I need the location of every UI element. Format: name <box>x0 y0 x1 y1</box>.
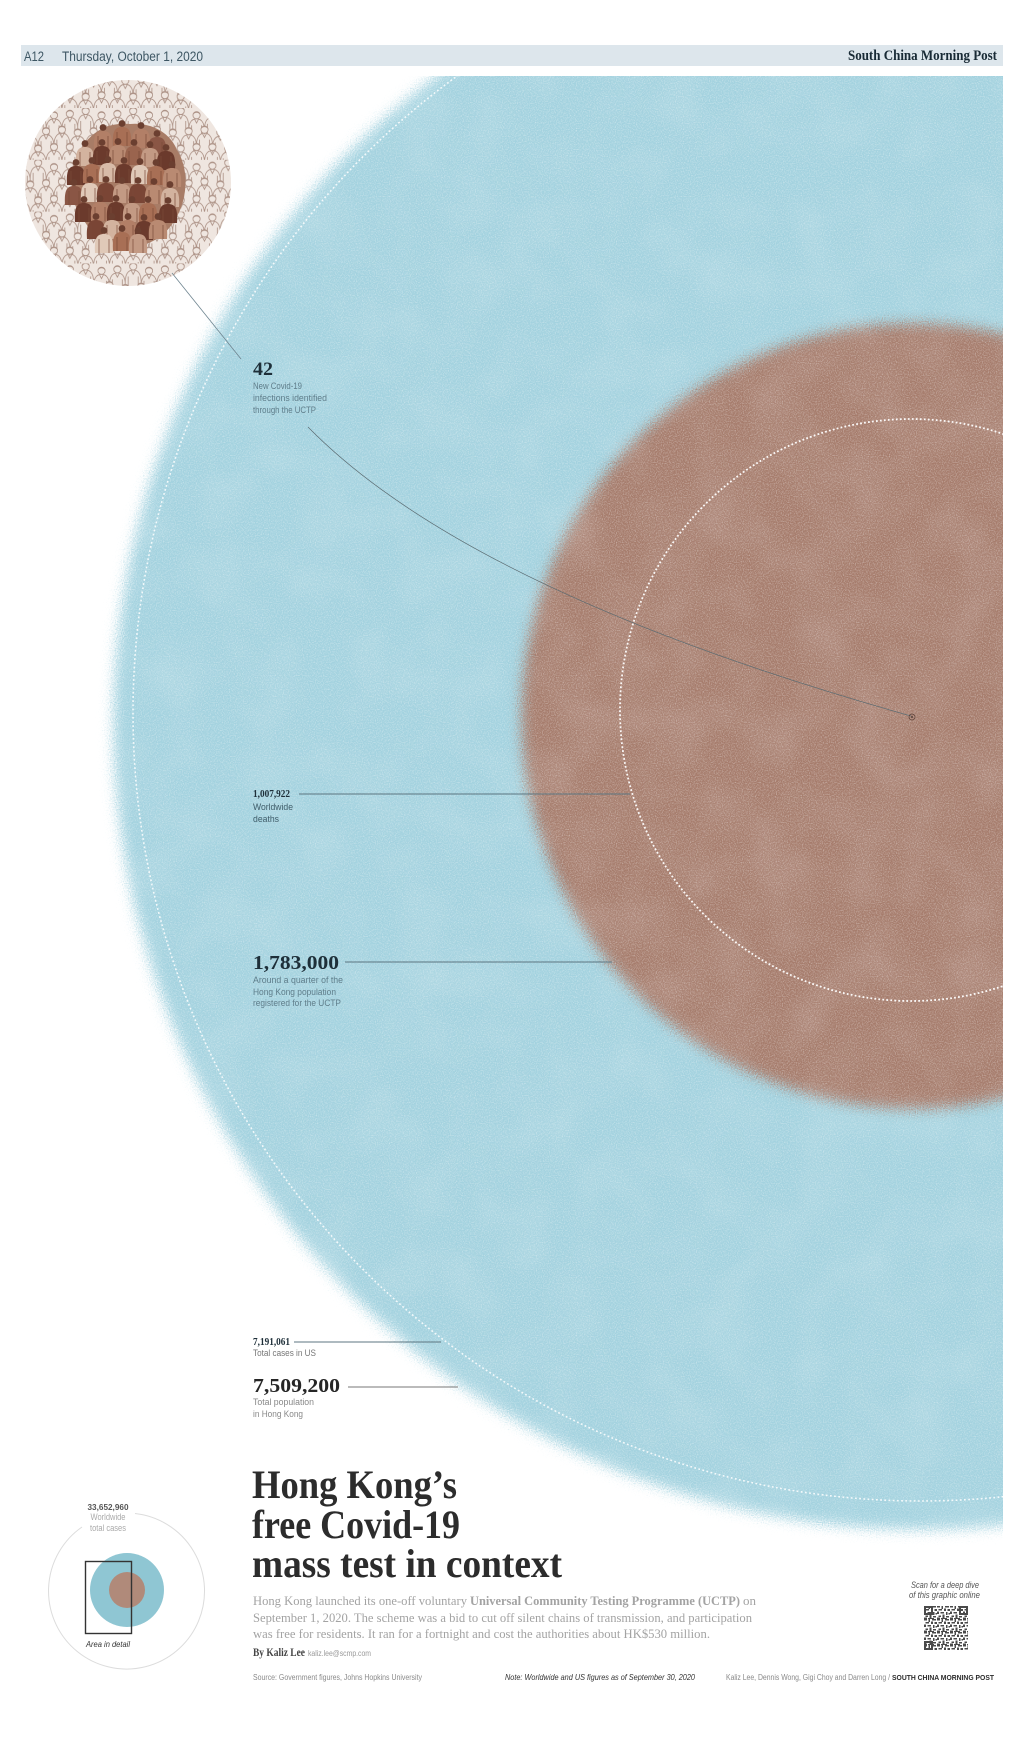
locator brown disc <box>109 1572 145 1608</box>
label: worldwide deaths <box>253 789 630 825</box>
headline <box>252 1462 563 1586</box>
label: 42 new infections: New Covid-19 <box>253 381 302 391</box>
intro paragraph: was free for residents. It ran for a fortnight and cost the authorities about HK$530 million. <box>253 1627 710 1641</box>
label: 42 new infections: infections identified <box>253 393 327 403</box>
leader: curve to centre dot <box>308 427 915 720</box>
proportional circles <box>114 0 1024 1529</box>
label: 42 new infections <box>253 359 327 415</box>
QR prompt: of this graphic online <box>909 1590 980 1600</box>
masthead: South China Morning Post <box>848 48 997 64</box>
label: Hong Kong population: in Hong Kong <box>253 1409 303 1419</box>
source line: Source: Government figures, Johns Hopkins University <box>253 1673 422 1682</box>
label: 1,783,000 registered: Around a quarter of the <box>253 975 343 985</box>
dotted circle: US cases <box>133 0 1024 1501</box>
page number: A12 <box>24 49 44 64</box>
brown disc: UCTP registered <box>522 324 1024 1108</box>
worldwide cases ring <box>49 1514 205 1669</box>
crowd medallion <box>20 75 236 291</box>
label: 42 new infections: 42 <box>253 359 273 380</box>
brown crowd of 42 <box>65 120 186 253</box>
credits: SOUTH CHINA MORNING POST <box>892 1673 994 1682</box>
worldwide cases label: 33,652,960 <box>88 1502 129 1512</box>
label: worldwide deaths: deaths <box>253 814 279 825</box>
header band <box>21 45 1003 66</box>
intro paragraph: September 1, 2020. The scheme was a bid to cut off silent chains of transmission, and participation <box>253 1611 753 1625</box>
label: Hong Kong population <box>253 1375 458 1419</box>
intro paragraph: Hong Kong launched its one-off voluntary <box>253 1594 468 1608</box>
area in detail caption: Area in detail <box>85 1639 131 1649</box>
label: total US cases: 7,191,061 <box>253 1337 290 1348</box>
QR code <box>924 1606 968 1650</box>
locator diagram <box>49 1502 205 1669</box>
worldwide cases label: total cases <box>90 1523 126 1533</box>
label: 1,783,000 registered: 1,783,000 <box>253 952 339 974</box>
worldwide cases label: Worldwide <box>90 1512 126 1522</box>
label: Hong Kong population: Total population <box>253 1397 314 1407</box>
dotted circle: worldwide deaths <box>620 419 1024 1001</box>
note: Note: Worldwide and US figures as of September 30, 2020 <box>505 1672 695 1682</box>
label: Hong Kong population: 7,509,200 <box>253 1375 340 1397</box>
worldwide cases label <box>88 1502 129 1533</box>
label: 1,783,000 registered: Hong Kong population <box>253 987 336 997</box>
blue disc: Hong Kong population <box>114 0 1024 1529</box>
intro paragraph: Universal Community Testing Programme (UCTP) <box>470 1594 740 1608</box>
credits: Kaliz Lee, Dennis Wong, Gigi Choy and Darren Long / <box>726 1673 891 1682</box>
QR prompt <box>909 1580 980 1600</box>
locator blue disc <box>90 1553 164 1627</box>
intro paragraph: on <box>743 1594 757 1608</box>
byline: By Kaliz Lee <box>253 1647 305 1659</box>
byline <box>253 1647 371 1659</box>
label: 1,783,000 registered <box>253 952 612 1008</box>
label: total US cases: Total cases in US <box>253 1348 316 1358</box>
label: 1,783,000 registered: registered for the UCTP <box>253 998 341 1008</box>
leader: medallion to 42 <box>172 273 241 359</box>
date: Thursday, October 1, 2020 <box>62 49 203 64</box>
area in detail frame <box>86 1562 132 1634</box>
headline: free Covid-19 <box>252 1502 460 1547</box>
headline: mass test in context <box>252 1541 563 1586</box>
label: worldwide deaths: Worldwide <box>253 802 293 813</box>
QR prompt: Scan for a deep dive <box>911 1580 979 1590</box>
byline: kaliz.lee@scmp.com <box>308 1649 371 1658</box>
headline: Hong Kong’s <box>252 1462 457 1507</box>
label: total US cases <box>253 1337 441 1358</box>
intro paragraph <box>253 1594 757 1641</box>
label: worldwide deaths: 1,007,922 <box>253 789 290 800</box>
label: 42 new infections: through the UCTP <box>253 405 316 415</box>
